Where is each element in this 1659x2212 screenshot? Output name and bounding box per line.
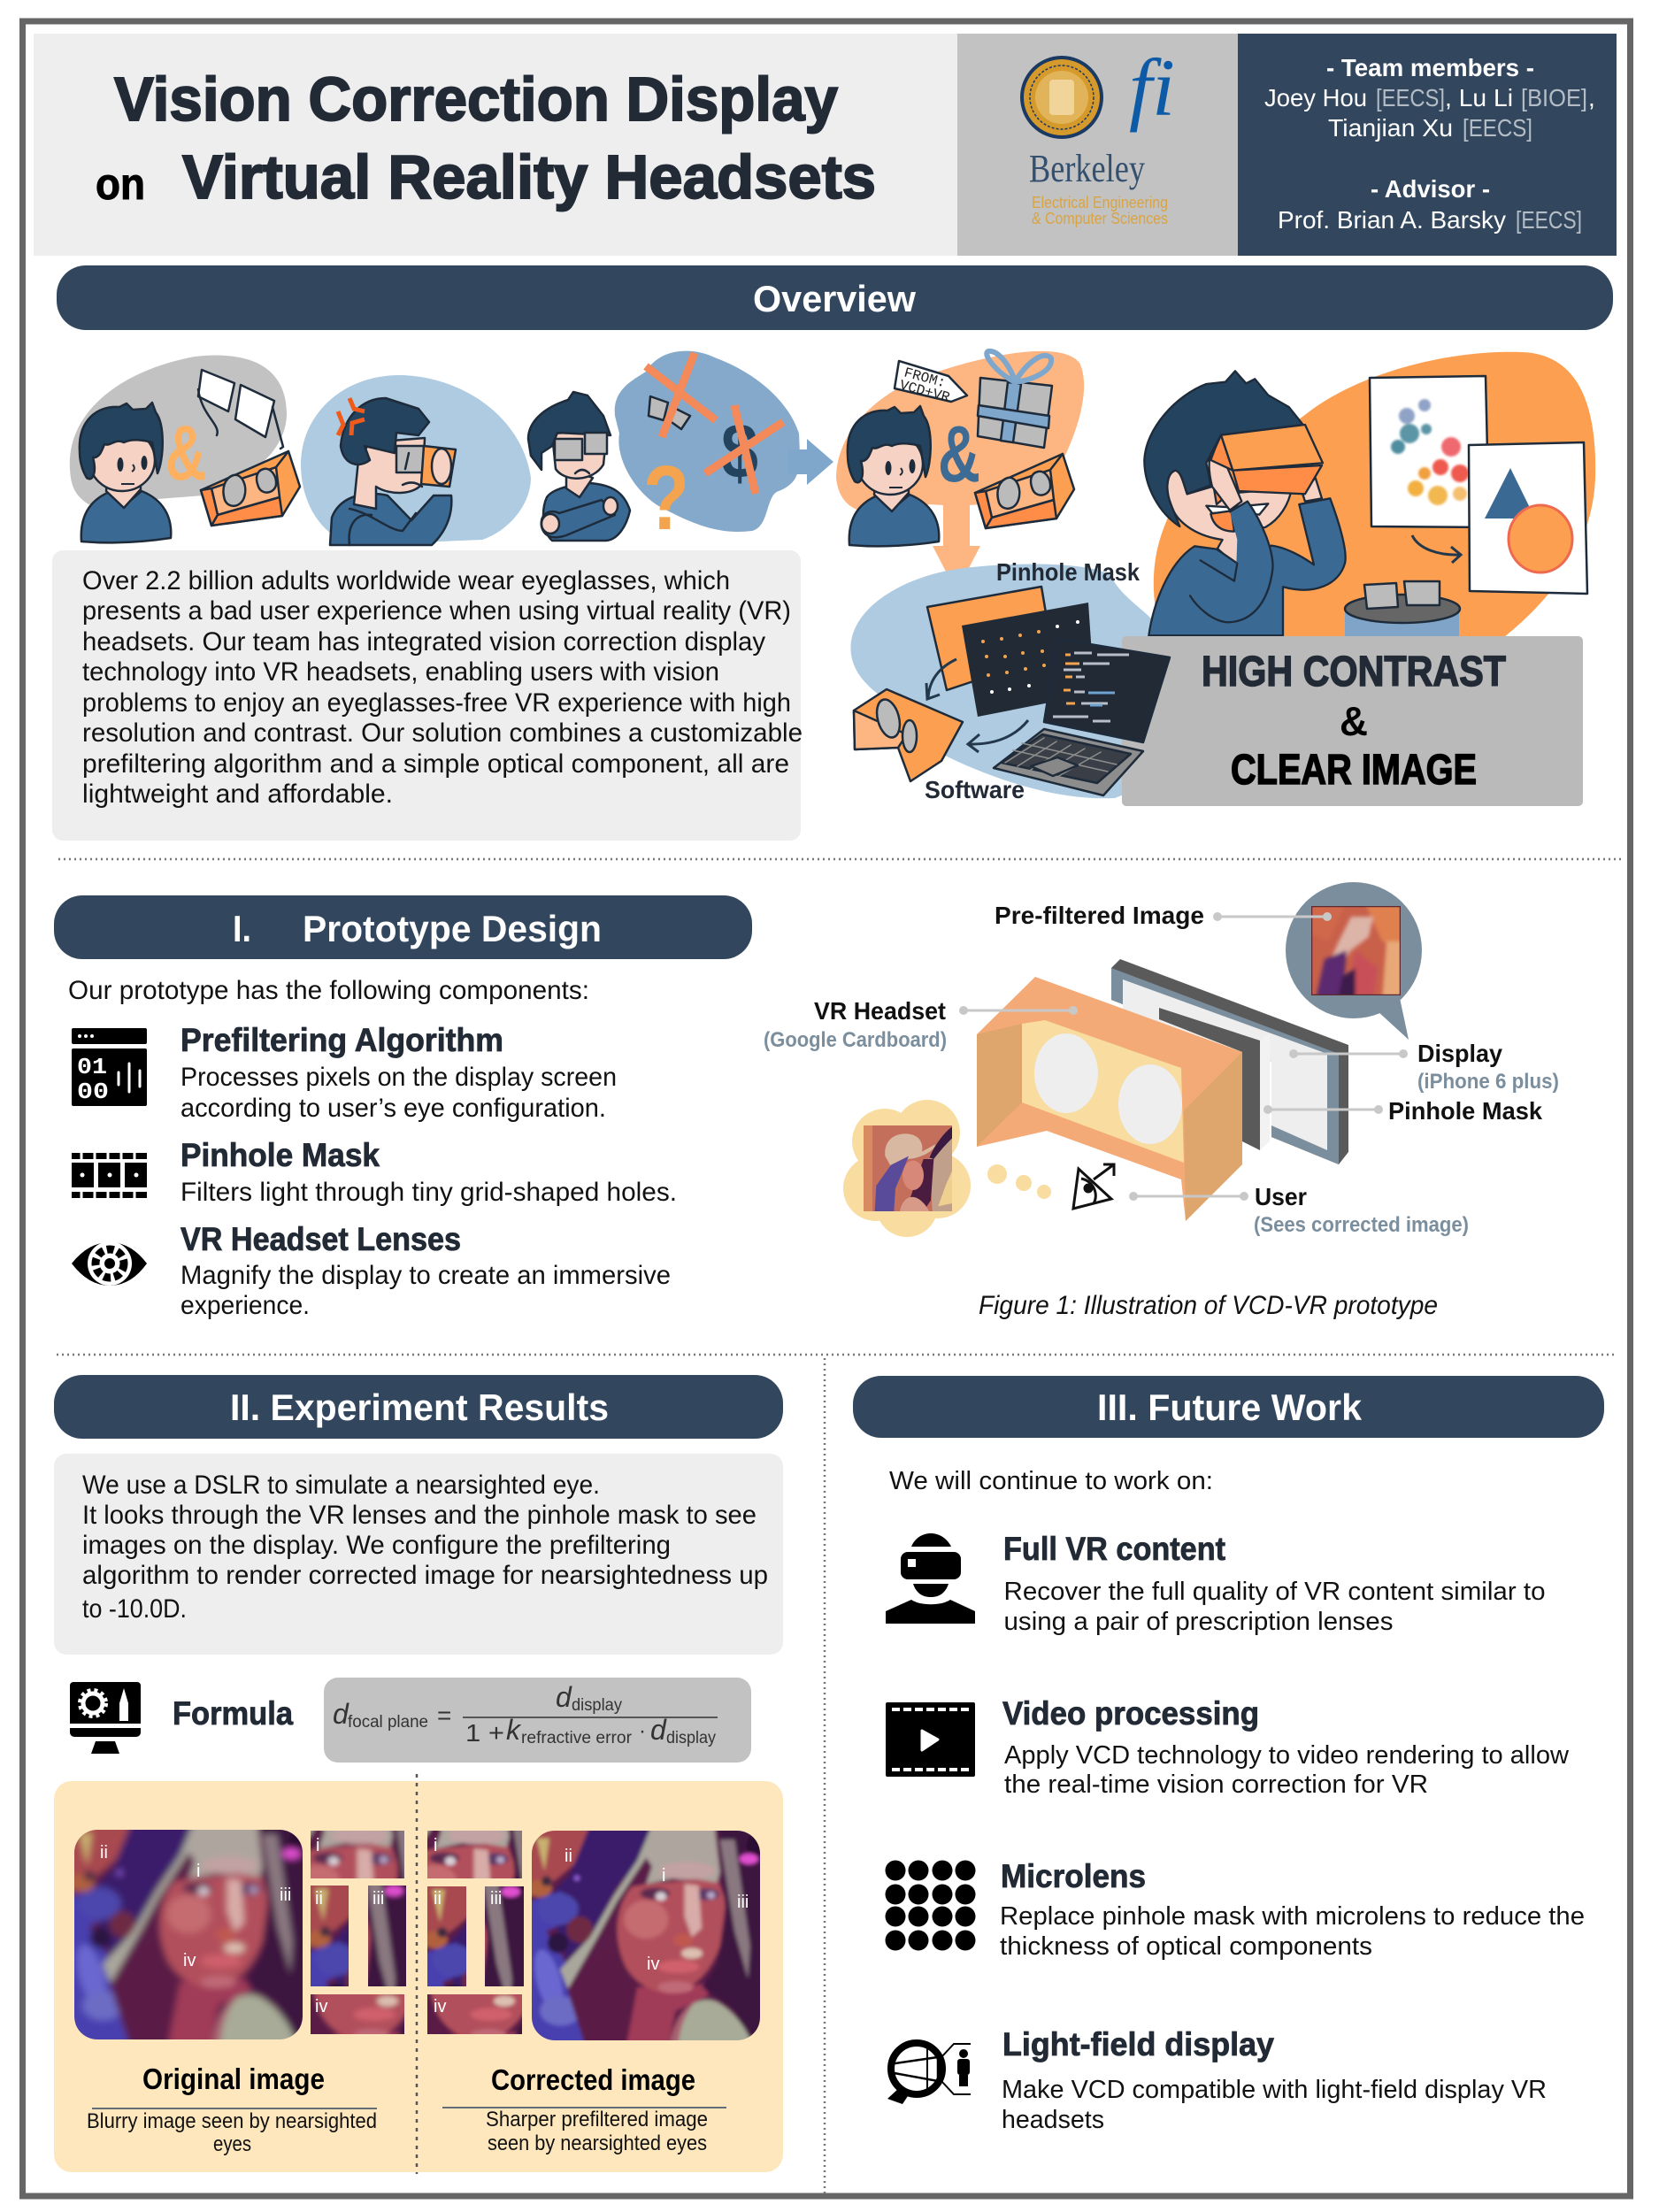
orange panel [927,587,1053,690]
panel: experiment text: algorithm to render corrected image for nearsightedness up [82,1561,768,1590]
item: pinhole mask: Pinhole Mask [180,1137,380,1173]
heading: prototype design: Prototype Design [303,908,602,949]
team members and advisor: [EECS] [1463,114,1532,142]
header band [34,34,1617,256]
image: original: iv [183,1951,196,1970]
panel: overview text: presents a bad user experience when using virtual reality (VR) [82,596,791,626]
pinhole mask layer [1159,1008,1270,1150]
team members and advisor: - Advisor - [1371,175,1490,203]
ampersand blue: & [938,411,980,499]
panel: overview text: lightweight and affordable. [82,780,393,809]
big person with headset [1144,371,1346,635]
title [96,65,876,211]
icon: university seal [1020,56,1103,139]
panel: high contrast: CLEAR IMAGE [1231,747,1477,794]
illustration: vcd solution [836,351,1595,806]
panel: overview text: resolution and contrast. Our solution combines a customizable [82,718,803,748]
icon: light-field [887,2043,971,2104]
icon: prefiltering algorithm: 00 [77,1079,109,1105]
item: vr headset lenses: VR Headset Lenses [180,1221,461,1257]
crops: original: iii [373,1889,384,1909]
caption: original image [87,2062,377,2156]
item: light-field display: Light-field display [1002,2026,1274,2062]
item: vr headset lenses: Magnify the display to create an immersive [180,1261,671,1290]
image: corrected: i [662,1866,665,1886]
image: original: iii [280,1886,291,1905]
big orange blob [1154,352,1595,637]
formula: d [556,1681,572,1713]
icon: gift [978,351,1052,448]
team members and advisor: Tianjian Xu [1328,114,1453,142]
display [1111,959,1348,1164]
panel: high contrast: HIGH CONTRAST [1202,649,1506,695]
logo: berkeley eecs: Electrical Engineering [1032,194,1168,211]
icon: prefiltering algorithm [72,1028,147,1106]
labels: (Google Cardboard) [764,1028,947,1052]
heading: future work [853,1376,1604,1438]
tag [895,361,967,406]
caption: corrected image: Corrected image [491,2063,695,2096]
caption: corrected image [442,2063,726,2155]
panel: overview text: headsets. Our team has integrated vision correction display [82,627,765,657]
icon: prefiltering algorithm: 01 [77,1054,107,1080]
caption: figure 1: Figure 1: Illustration of VCD-VR prototype [979,1291,1438,1320]
image: corrected: ii [565,1847,572,1866]
team members and advisor: [EECS] [1376,84,1445,111]
icon: user eye [1073,1164,1114,1209]
icon: struck glasses [649,396,690,429]
team members and advisor: [BIOE] [1521,84,1587,111]
labels: User [1255,1183,1307,1210]
code lines [1053,653,1129,721]
panel: experiment text: We use a DSLR to simulate a nearsighted eye. [82,1471,600,1500]
labels: Pinhole Mask [1388,1097,1542,1125]
leader lines [961,913,1407,1200]
item: pinhole mask: Filters light through tiny grid-shaped holes. [180,1178,677,1207]
orange blob [836,351,1084,513]
cross marks [646,353,783,494]
formula: focal plane [348,1713,428,1732]
formula: display [666,1729,716,1747]
heading: future work: III. Future Work [1097,1386,1363,1428]
item: video processing: Apply VCD technology to video rendering to allow [1004,1741,1570,1770]
formula: refractive error [521,1729,633,1747]
icon: anger marks [338,398,365,435]
arrows [926,659,1028,752]
caption: original image: Blurry image seen by nearsighted [87,2109,377,2133]
formula: = [437,1701,451,1729]
image: corrected [532,1831,760,2040]
image: corrected: iii [737,1893,749,1912]
crops: corrected: ii [434,1889,442,1909]
panel: experiment text: to -10.0D. [82,1594,187,1624]
logo: berkeley eecs: Berkeley [1029,147,1145,190]
item: prefiltering algorithm: Processes pixels on the display screen [180,1063,617,1092]
item: prefiltering algorithm [180,1022,617,1123]
item: light-field display: Make VCD compatible with light-field display VR [1002,2076,1547,2104]
item: prefiltering algorithm: Prefiltering Algorithm [180,1022,503,1058]
logo: fung institute: fi [1129,42,1175,133]
item: video processing: the real-time vision correction for VR [1004,1770,1428,1799]
label: pinhole mask: Pinhole Mask [996,558,1140,586]
heading: prototype design: I. [233,908,251,949]
heading: experiment results [54,1375,783,1439]
image: corrected: iv [647,1955,659,1974]
poster 1 [1370,376,1489,527]
crops: original: iv [315,1997,327,2016]
item: microlens [1000,1858,1585,1961]
glasses on stand [1345,581,1460,637]
panel: overview text: problems to enjoy an eyeglasses-free VR experience with high [82,688,791,718]
arrow: curved [1412,535,1461,563]
crops: corrected: iv [434,1997,446,2016]
team members and advisor: , [1588,84,1595,111]
arrow: down [933,500,980,592]
tag: VCD+VR [898,377,952,406]
heading: experiment results: II. Experiment Results [230,1386,609,1428]
panel: experiment text: images on the display. We configure the prefiltering [82,1531,671,1560]
team members and advisor [1264,54,1595,234]
item: microlens: Microlens [1001,1858,1146,1894]
title: Virtual Reality Headsets [182,142,876,211]
thought dots [987,1164,1051,1199]
item: full vr content: Full VR content [1003,1531,1225,1567]
figure: prototype diagram [764,882,1559,1237]
labels [764,902,1559,1237]
headset [977,977,1242,1221]
illustration: problem with glasses and headsets [70,351,800,549]
labels: (Sees corrected image) [1254,1213,1469,1237]
formula: · [639,1719,646,1743]
icon: glasses [198,370,283,449]
image: original [74,1830,303,2039]
caption: corrected image: Sharper prefiltered image [486,2108,708,2131]
intro: future work: We will continue to work on: [889,1467,1213,1495]
panel: overview text [52,550,803,841]
label: software: Software [925,776,1025,803]
item: vr headset lenses: experience. [180,1291,310,1320]
icon: microlens grid [885,1860,975,1950]
icon: vr user [886,1533,975,1624]
labels: (iPhone 6 plus) [1417,1070,1559,1094]
labels: VR Headset [814,997,946,1025]
item: video processing: Video processing [1002,1695,1259,1732]
panel: experiment text [54,1454,783,1655]
item: light-field display [1002,2026,1547,2134]
logo: berkeley eecs [1029,147,1168,227]
formula: display [572,1696,622,1715]
title: on [96,159,145,209]
icon: video [886,1702,975,1777]
icon: formula monitor [70,1682,141,1754]
panel: image comparison [53,1775,783,2172]
panel: overview text: technology into VR headsets, enabling users with vision [82,657,719,687]
item: full vr content: Recover the full quality of VR content similar to [1003,1578,1545,1606]
heading: overview: Overview [753,278,916,319]
icon: vr headset lenses [72,1241,147,1286]
arrow: to solution [788,439,833,485]
problem blob [615,351,800,532]
label: formula: Formula [173,1695,293,1732]
panel: experiment text: It looks through the VR lenses and the pinhole mask to see [82,1501,757,1530]
intro: components: Our prototype has the following components: [68,976,589,1005]
heading: prototype design [54,895,752,959]
item: microlens: Replace pinhole mask with microlens to reduce the [1000,1902,1585,1931]
panel: high contrast: & [1340,698,1368,744]
caption: original image: Original image [142,2062,325,2095]
heading: overview [57,265,1613,330]
thinking person [528,392,630,541]
item: vr headset lenses [180,1221,671,1320]
formula [324,1678,751,1763]
crops: corrected: i [434,1836,437,1855]
light blue blob [850,564,1164,798]
item: video processing [1002,1695,1570,1799]
panel: high contrast [1122,636,1583,806]
team members and advisor: , Lu Li [1445,84,1513,111]
speech bubble: pre-filtered image [1286,882,1422,1040]
gray blob [70,356,287,504]
icon: dollar sign: $ [721,407,758,495]
caption: original image: eyes [213,2132,251,2156]
item: prefiltering algorithm: according to user’s eye configuration. [180,1094,606,1123]
caption: corrected image: seen by nearsighted eyes [488,2131,707,2155]
team members and advisor: Prof. Brian A. Barsky [1278,206,1506,234]
laptop [994,639,1170,795]
formula: k [506,1714,522,1746]
team members and advisor: [EECS] [1516,206,1582,234]
formula: 1 + [465,1719,504,1747]
thought bubble with corrected image [843,1100,971,1237]
poster 2 [1469,442,1587,594]
angry person blob [301,375,531,545]
pinhole mask panel [962,603,1094,717]
item: full vr content: using a pair of prescription lenses [1003,1608,1393,1636]
person with headset [330,398,456,545]
tag: FROM: [902,365,948,391]
team members and advisor: Joey Hou [1264,84,1367,111]
headset lower [854,689,963,781]
panel: overview text: prefiltering algorithm and a simple optical component, all are [82,749,789,779]
item: full vr content [1003,1531,1545,1636]
panel: overview text: Over 2.2 billion adults worldwide wear eyeglasses, which [82,566,730,595]
crops: original: i [316,1836,319,1855]
icon: pinhole mask [72,1152,147,1199]
item: light-field display: headsets [1002,2106,1104,2134]
crops: original [156,1775,561,2117]
logo: berkeley eecs: & Computer Sciences [1032,210,1168,227]
ampersand: & [165,409,206,496]
question mark: ? [643,447,689,549]
item: pinhole mask [180,1137,677,1207]
crops: corrected [273,1775,678,2118]
labels: Display [1417,1040,1502,1067]
image: original: i [196,1862,200,1881]
labels: Pre-filtered Image [995,902,1204,929]
formula: d [333,1698,349,1730]
crops: corrected: iii [490,1889,502,1909]
formula: d [650,1714,667,1746]
item: microlens: thickness of optical components [1000,1932,1372,1961]
crops: original: ii [315,1889,323,1909]
title: Vision Correction Display [114,65,838,134]
team members and advisor: - Team members - [1326,54,1534,81]
image: original: ii [100,1843,108,1863]
